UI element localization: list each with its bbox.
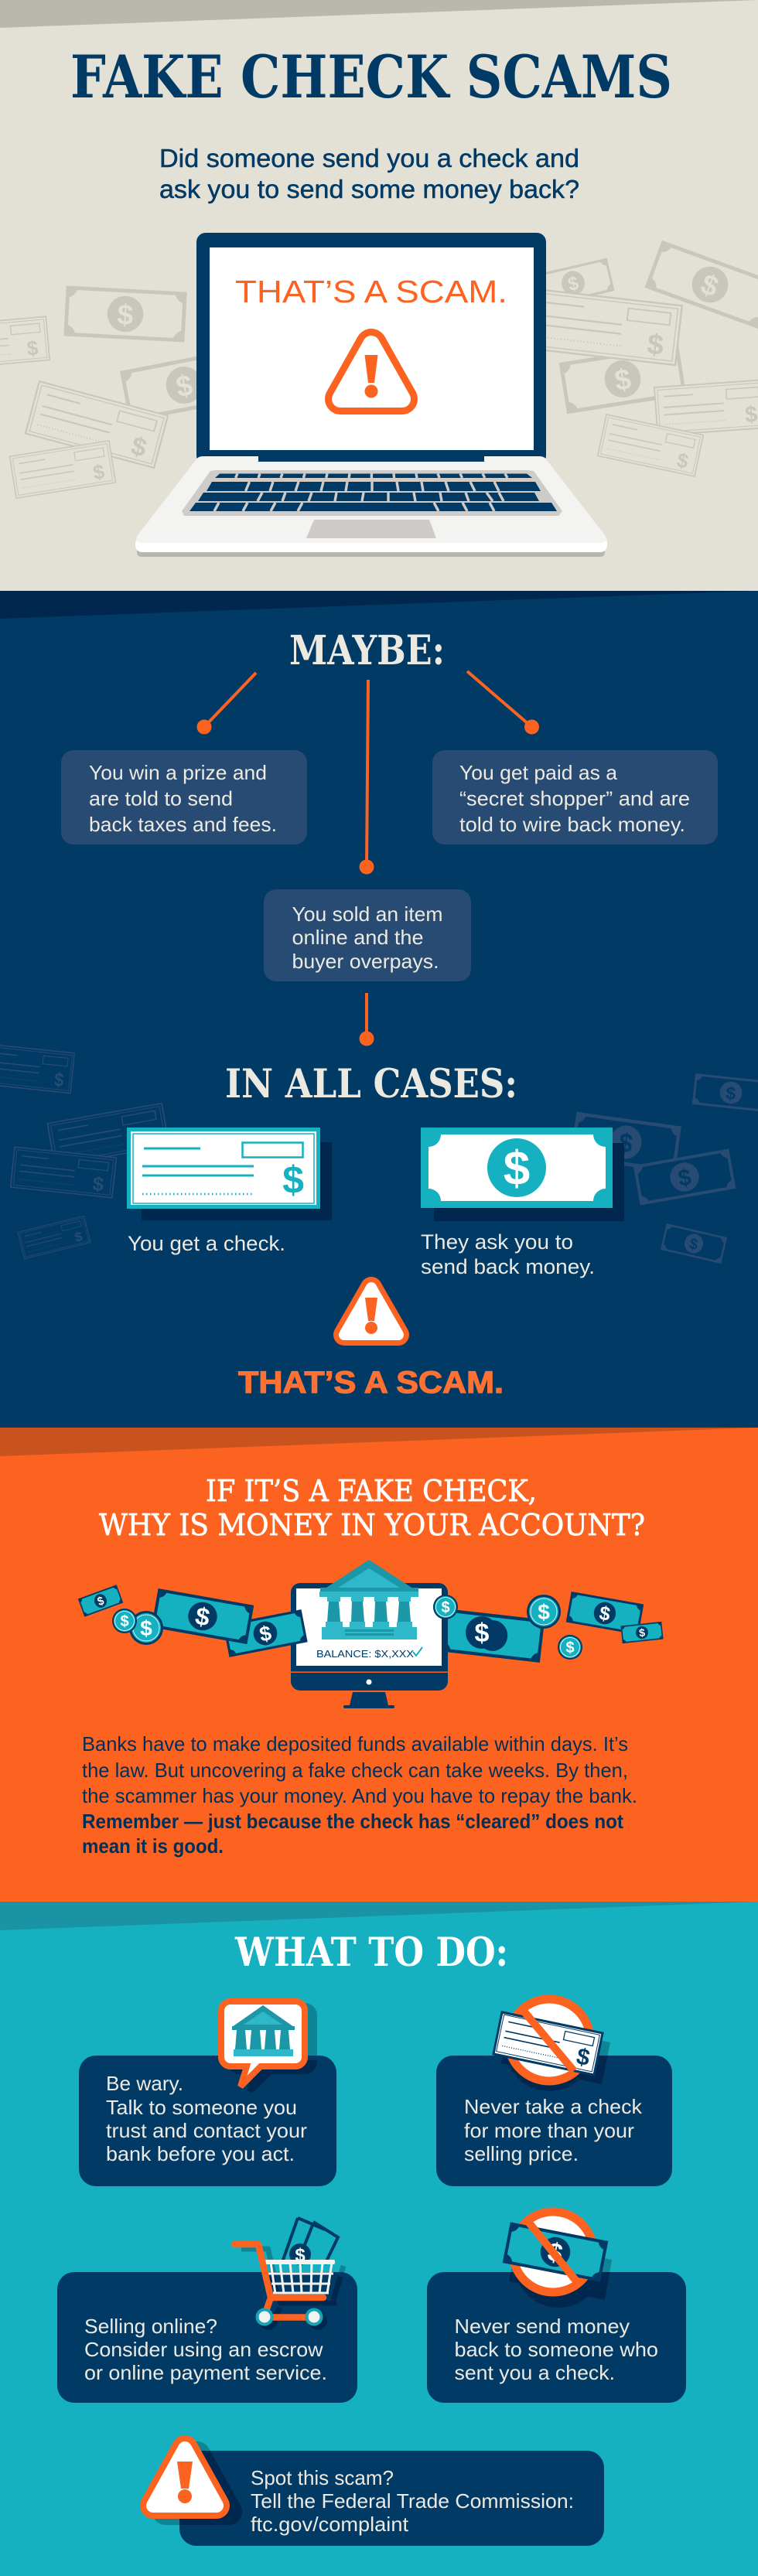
caption: you get a check: You get a check. <box>128 1232 285 1255</box>
caption: send back money: They ask you to <box>421 1230 573 1254</box>
coins: $ <box>565 1639 575 1656</box>
screen text: THAT’S A SCAM. <box>235 274 507 309</box>
card: win a prize <box>61 750 307 844</box>
card: be wary: bank before you act. <box>106 2142 295 2165</box>
icon: no money <box>503 2212 608 2292</box>
coins: $ <box>538 1600 550 1624</box>
coins <box>112 1595 582 1660</box>
explanation text <box>82 1732 637 1858</box>
background checks and bills: $ <box>725 1083 737 1104</box>
subtitle: Did someone send you a check and <box>159 144 579 172</box>
card: selling online <box>57 2218 357 2403</box>
card: never take a check: for more than your <box>464 2119 634 2142</box>
heading: what to do: WHAT TO DO: <box>234 1929 508 1976</box>
callout: that's a scam: THAT’S A SCAM. <box>238 1366 504 1400</box>
background checks and bills <box>0 241 758 498</box>
card: be wary: Be wary. <box>106 2072 183 2095</box>
money and computer illustration: $ <box>638 1626 646 1639</box>
background checks and bills: $ <box>744 402 758 428</box>
panel: what to do <box>0 1902 758 2576</box>
connector: center <box>359 680 374 874</box>
coins: $ <box>140 1616 152 1640</box>
background checks and bills: $ <box>616 1128 635 1159</box>
card: selling online: or online payment service. <box>84 2361 327 2384</box>
heading: IF IT’S A FAKE CHECK, <box>206 1474 537 1508</box>
card: spot this scam: Spot this scam? <box>251 2466 394 2489</box>
heading: maybe: MAYBE: <box>289 627 445 674</box>
caption: send back money: send back money. <box>421 1255 595 1278</box>
background checks and bills: $ <box>91 1173 105 1196</box>
card: secret shopper: told to wire back money. <box>459 813 685 836</box>
money and computer illustration: $ <box>475 1619 490 1648</box>
title: FAKE CHECK SCAMS <box>70 43 672 111</box>
computer monitor <box>291 1583 448 1708</box>
icon: warning triangle <box>344 1288 398 1335</box>
money and computer illustration: $ <box>598 1602 612 1626</box>
card: be wary: Talk to someone you <box>106 2096 297 2119</box>
background checks and bills: $ <box>676 1165 694 1192</box>
icon: check mark <box>413 1647 422 1656</box>
panel: hero: ask you to send some money back? <box>159 175 579 203</box>
card: secret shopper: You get paid as a <box>459 761 618 784</box>
card: win a prize: back taxes and fees. <box>89 813 277 836</box>
panel: maybe and in all cases <box>0 591 758 1428</box>
heading: in all cases: IN ALL CASES: <box>225 1061 517 1107</box>
icon: bank speech bubble <box>221 2001 305 2086</box>
panel: hero <box>0 0 758 591</box>
card: never take a check <box>436 1999 672 2186</box>
explanation text: Banks have to make deposited funds available within days. It’s <box>82 1732 628 1755</box>
heading <box>99 1474 645 1542</box>
icon: warning triangle <box>153 2448 217 2506</box>
card: spot this scam: ftc.gov/complaint <box>251 2513 409 2536</box>
background checks and bills: $ <box>117 299 134 331</box>
card: win a prize: are told to send <box>89 787 233 810</box>
card: be wary <box>79 2001 336 2186</box>
background checks and bills: $ <box>675 449 690 473</box>
card: sold an item: You sold an item <box>292 902 442 926</box>
card: sold an item: buyer overpays. <box>292 950 439 973</box>
background checks and bills: $ <box>613 362 633 397</box>
card: spot this scam <box>153 2448 604 2546</box>
coins: $ <box>120 1613 129 1630</box>
background checks and bills: $ <box>91 459 107 484</box>
card: sold an item: online and the <box>292 926 424 949</box>
icon: check: $ <box>282 1158 304 1202</box>
background checks and bills: $ <box>566 272 581 295</box>
laptop illustration <box>135 233 607 557</box>
connector: left <box>196 673 256 735</box>
background checks and bills: $ <box>688 1235 700 1254</box>
icon: dollar bill: $ <box>504 1142 530 1196</box>
card: sold an item <box>264 889 471 981</box>
card: never take a check: selling price. <box>464 2142 579 2165</box>
money and computer illustration: $ <box>96 1595 106 1609</box>
background checks and bills: $ <box>73 1228 84 1245</box>
card: secret shopper: “secret shopper” and are <box>459 787 690 810</box>
money and computer illustration <box>78 1560 663 1708</box>
icon: shopping cart with money: $ <box>295 2245 306 2266</box>
icon: shopping cart with money <box>234 2218 338 2325</box>
balance label: BALANCE: $X,XXX <box>316 1648 414 1660</box>
money and computer illustration: $ <box>258 1621 273 1646</box>
card: never send money: back to someone who <box>455 2338 658 2361</box>
background checks and bills: $ <box>697 268 722 303</box>
explanation text: the law. But uncovering a fake check can take weeks. By then, <box>82 1759 628 1782</box>
card: never send money: sent you a check. <box>455 2361 615 2384</box>
heading: WHY IS MONEY IN YOUR ACCOUNT? <box>99 1508 645 1542</box>
background checks and bills: $ <box>646 328 665 361</box>
explanation text: the scammer has your money. And you have to repay the bank. <box>82 1784 637 1807</box>
connector: right <box>467 671 539 735</box>
card: selling online: Selling online? <box>84 2315 217 2338</box>
icon: no check <box>493 1999 603 2081</box>
card: selling online: Consider using an escrow <box>84 2338 323 2361</box>
background checks and bills: $ <box>173 368 195 404</box>
explanation text: Remember — just because the check has “cleared” does not <box>82 1810 623 1833</box>
icon: check <box>128 1129 332 1220</box>
background checks and bills: $ <box>128 432 150 463</box>
background checks and bills: $ <box>53 1069 65 1090</box>
icon: dollar bill <box>421 1128 624 1221</box>
card: be wary: trust and contact your <box>106 2119 307 2142</box>
background checks and bills <box>0 1044 758 1264</box>
card: never send money <box>427 2212 686 2403</box>
panel: why is money in your account <box>0 1428 758 1902</box>
coins: $ <box>441 1599 450 1616</box>
card: never take a check: Never take a check <box>464 2095 643 2118</box>
icon: no check: $ <box>574 2044 592 2071</box>
connector: to in all cases <box>359 993 374 1046</box>
card: never send money: Never send money <box>455 2315 630 2338</box>
icon: warning triangle <box>340 344 402 399</box>
background checks and bills: $ <box>26 336 39 360</box>
card: secret shopper <box>432 750 718 844</box>
icon: no money: $ <box>545 2238 565 2268</box>
card: win a prize: You win a prize and <box>89 761 267 784</box>
money and computer illustration: $ <box>193 1602 212 1632</box>
card: spot this scam: Tell the Federal Trade Commission: <box>251 2489 574 2513</box>
bank building <box>319 1560 418 1639</box>
caption: send back money <box>421 1230 595 1278</box>
explanation text: mean it is good. <box>82 1834 224 1858</box>
